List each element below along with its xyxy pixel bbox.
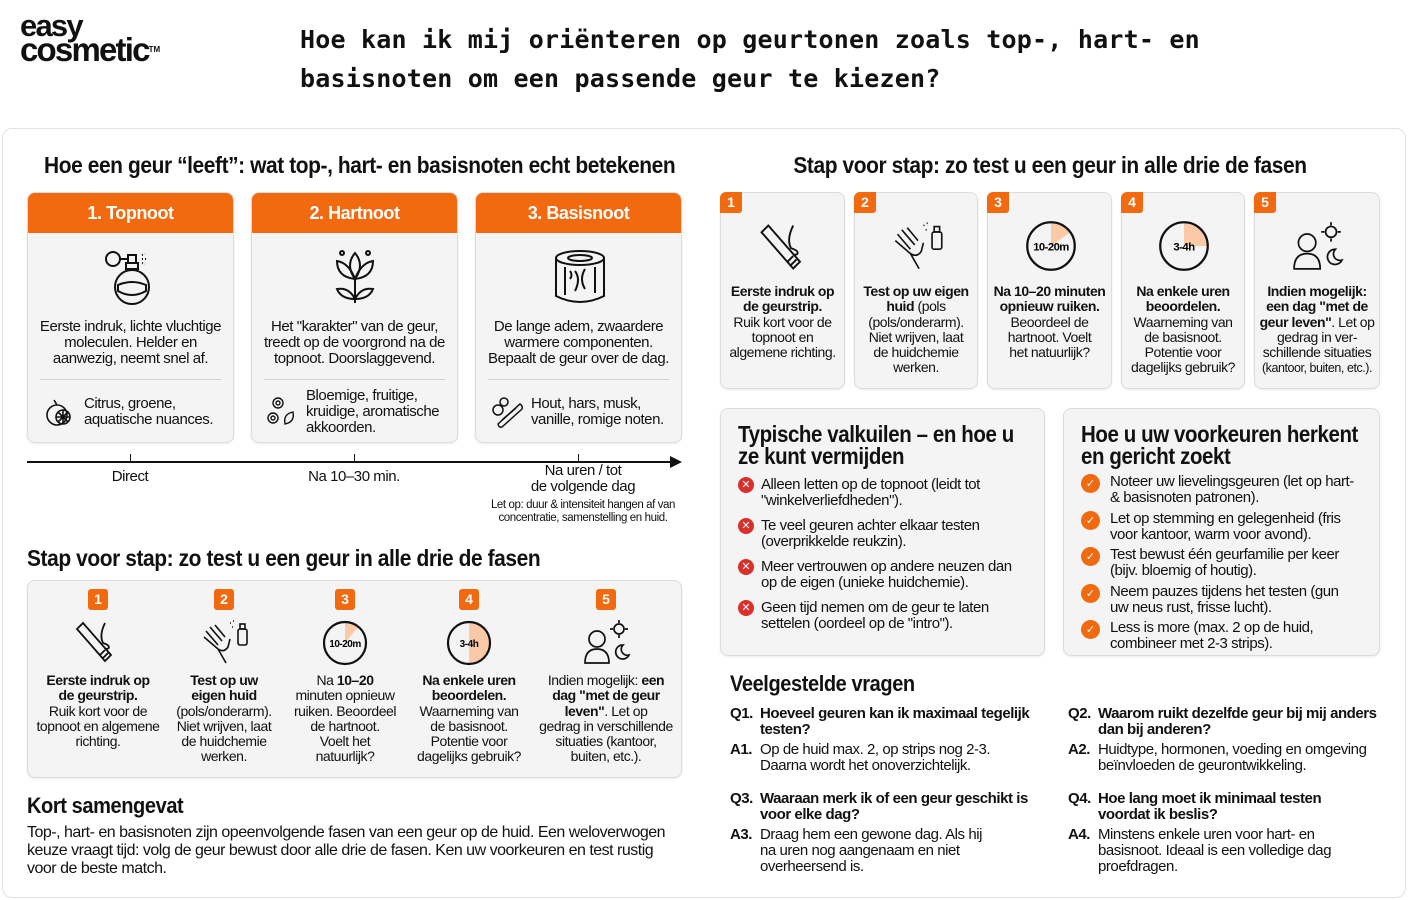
summary text: keuze vraagt tijd: volg de geur bewust door alle drie de fasen. Ken uw voorkeuren en test rustig <box>27 842 653 859</box>
heading: FAQ: Veelgestelde vragen <box>730 671 915 696</box>
step card 2: werken. <box>893 359 939 375</box>
card: topnoot: Citrus, groene, <box>84 395 176 412</box>
step 2: 2 <box>220 591 228 607</box>
step 5: dag "met de geur <box>552 687 660 703</box>
step 2 <box>176 589 272 764</box>
heading: notes: Hoe een geur “leeft”: wat top-, hart- en basisnoten echt betekenen <box>44 152 675 178</box>
step 4: 4 <box>465 591 473 607</box>
step card 3: hartnoot. Voelt <box>1008 329 1091 345</box>
step 2: Test op uw <box>190 672 258 688</box>
preferences heading: Hoe u uw voorkeuren herkent en gericht zoekt <box>1081 421 1358 469</box>
step card 2: de huidchemie <box>873 344 959 360</box>
step 4: Na enkele uren <box>422 672 516 688</box>
card: hartnoot: treedt op de voorgrond na de <box>264 334 445 351</box>
faq 4 <box>1068 790 1331 875</box>
logo: easy <box>20 8 82 43</box>
timeline label: hours: Na uren / tot <box>545 462 621 479</box>
pitfall 3: ✕ <box>741 560 751 573</box>
faq 3: na uren nog aangenaam en niet <box>760 842 960 859</box>
step 3: 3 <box>341 591 349 607</box>
pref 1 <box>1081 473 1354 506</box>
step card 1: de geurstrip. <box>743 298 822 314</box>
step card 4 <box>1121 192 1245 389</box>
step card 2: (pols/onderarm). <box>868 314 964 330</box>
faq 3: Q3. <box>730 790 753 807</box>
step card 1: 1 <box>727 194 735 210</box>
card: basisnoot: De lange adem, zwaardere <box>494 318 663 335</box>
step 2: eigen huid <box>191 687 257 703</box>
step card 5: gedrag in ver- <box>1277 329 1357 345</box>
step card 3 <box>987 192 1112 389</box>
step card 5: 5 <box>1261 194 1269 210</box>
timeline label: direct: Direct <box>112 468 148 485</box>
faq 1: Hoeveel geuren kan ik maximaal tegelijk <box>760 705 1029 722</box>
pref 3 <box>1081 546 1340 579</box>
pitfall 2: Te veel geuren achter elkaar testen (overprikkelde reukzin). <box>761 517 980 550</box>
timeline note <box>491 499 675 524</box>
card: hartnoot: Het "karakter" van de geur, <box>271 318 438 335</box>
step card 4: dagelijks gebruik? <box>1131 359 1235 375</box>
title <box>300 25 1200 93</box>
step 1: de geurstrip. <box>59 687 137 703</box>
pref 5: combineer met 2-3 strips). <box>1110 635 1273 652</box>
faq 4: basisnoot. Ideaal is een volledige dag <box>1098 842 1331 859</box>
pref 3: ✓ <box>1086 550 1095 563</box>
faq 4: Hoe lang moet ik minimaal testen <box>1098 790 1321 807</box>
step card 4: beoordelen. <box>1146 298 1220 314</box>
pref 1: ✓ <box>1086 477 1095 490</box>
step card 1 <box>720 192 845 389</box>
faq 4: Minstens enkele uren voor hart- en <box>1098 826 1314 843</box>
card: hartnoot: akkoorden. <box>306 419 376 436</box>
step card 5: geur leven". Let op <box>1260 314 1374 330</box>
faq 1: Daarna wordt het onoverzichtelijk. <box>760 757 971 774</box>
faq 3: A3. <box>730 826 752 843</box>
step 3: de hartnoot. <box>310 718 380 734</box>
faq 2: beïnvloeden de geurontwikkeling. <box>1098 757 1306 774</box>
card: basisnoot <box>475 192 682 443</box>
card: hartnoot: 2. Hartnoot <box>309 203 400 223</box>
pref 4: uw neus rust, frisse lucht). <box>1110 599 1272 616</box>
step card 3: het natuurlijk? <box>1009 344 1090 360</box>
faq 2: dan bij anderen? <box>1098 721 1211 738</box>
faq 4: A4. <box>1068 826 1090 843</box>
step 3: minuten opnieuw <box>295 687 395 703</box>
step card 3: Beoordeel de <box>1011 314 1088 330</box>
step 4: dagelijks gebruik? <box>417 748 521 764</box>
title: basisnoten om een passende geur te kiezen? <box>300 64 941 93</box>
step card 3: 10-20m <box>1033 242 1069 254</box>
timeline label: 10-30: Na 10–30 min. <box>308 468 400 485</box>
step card 2: Test op uw eigen <box>863 283 969 299</box>
icon: log <box>555 250 605 303</box>
step card 4: 3-4h <box>1173 242 1195 254</box>
faq 3: Waaraan merk ik of een geur geschikt is <box>760 790 1028 807</box>
pref 4: ✓ <box>1086 587 1095 600</box>
pref 3: Test bewust één geurfamilie per keer <box>1110 546 1339 563</box>
faq 3: overheersend is. <box>760 858 864 875</box>
pref 2: Let op stemming en gelegenheid (fris <box>1110 510 1341 527</box>
heading: steps right: Stap voor stap: zo test u een geur in alle drie de fasen <box>793 152 1307 178</box>
heading: steps left: Stap voor stap: zo test u een geur in alle drie de fasen <box>27 545 540 571</box>
faq 3: Draag hem een gewone dag. Als hij <box>760 826 982 843</box>
card: basisnoot: warmere componenten. <box>504 334 653 351</box>
logo <box>20 8 160 68</box>
heading: summary: Kort samengevat <box>27 793 183 818</box>
card: topnoot: moleculen. Helder en <box>64 334 197 351</box>
pref 1: & basisnoten patronen). <box>1110 489 1259 506</box>
pref 3: (bijv. bloemig of houtig). <box>1110 562 1256 579</box>
step 5: situaties (kantoor, <box>555 733 657 749</box>
step card 3: opnieuw ruiken. <box>1000 298 1099 314</box>
step 4: 3-4h <box>460 639 479 650</box>
step 5: buiten, etc.). <box>571 748 641 764</box>
step 3 <box>294 589 396 764</box>
step 1: Ruik kort voor de <box>49 703 147 719</box>
faq 2: A2. <box>1068 741 1090 758</box>
pitfall 1: Alleen letten op de topnoot (leidt tot "winkelverliefdheden"). <box>761 476 980 509</box>
pref 2: ✓ <box>1086 514 1095 527</box>
step card 2: huid (pols <box>886 298 946 314</box>
step card 2 <box>854 192 978 389</box>
step 2: de huidchemie <box>181 733 267 749</box>
pref 4: Neem pauzes tijdens het testen (gun <box>1110 583 1339 600</box>
step 5: 5 <box>602 591 610 607</box>
card: topnoot: aanwezig, neemt snel af. <box>53 350 208 367</box>
step card 4: Na enkele uren <box>1136 283 1230 299</box>
step card 5: (kantoor, buiten, etc.). <box>1262 361 1372 375</box>
step 5: gedrag in verschillende <box>539 718 673 734</box>
step 5: leven". Let op <box>565 703 647 719</box>
timeline <box>27 454 682 524</box>
step card 2: 2 <box>861 194 869 210</box>
icon: flowers herbs <box>267 397 294 425</box>
faq 2 <box>1068 705 1377 774</box>
step 1: richting. <box>76 733 120 749</box>
step card 1: algemene richting. <box>729 344 836 360</box>
panel: steps left <box>27 580 682 778</box>
faq 3 <box>730 790 1028 875</box>
pref 2 <box>1081 510 1341 543</box>
step card 5: schillende situaties <box>1263 344 1371 360</box>
faq 2: Waarom ruikt dezelfde geur bij mij anders <box>1098 705 1377 722</box>
step card 5: een dag "met de <box>1266 298 1368 314</box>
timeline label: hours <box>531 462 635 495</box>
card: hartnoot: kruidige, aromatische <box>306 403 439 420</box>
card: topnoot: 1. Topnoot <box>87 203 174 223</box>
icon: perfume bottle <box>105 251 150 305</box>
icon: vanilla wood <box>492 397 523 428</box>
panel: preferences <box>1063 408 1380 656</box>
pitfall 1: ✕ <box>741 478 751 491</box>
step card 1: Eerste indruk op <box>731 283 834 299</box>
step card 2: Niet wrijven, laat <box>869 329 963 345</box>
pitfall 3: Meer vertrouwen op andere neuzen dan op de eigen (unieke huidchemie). <box>761 558 1012 591</box>
card: topnoot: Eerste indruk, lichte vluchtige <box>40 318 221 335</box>
faq 2: Huidtype, hormonen, voeding en omgeving <box>1098 741 1366 758</box>
card: hartnoot: topnoot. Doorslaggevend. <box>274 350 435 367</box>
step 1: topnoot en algemene <box>36 718 160 734</box>
step card 1: topnoot en <box>752 329 813 345</box>
card: hartnoot: Bloemige, fruitige, <box>306 387 418 404</box>
title: Hoe kan ik mij oriënteren op geurtonen zoals top-, hart- en <box>300 25 1200 54</box>
card: basisnoot: Hout, hars, musk, <box>531 395 641 412</box>
pitfall 4: Geen tijd nemen om de geur te laten settelen (oordeel op de "intro"). <box>761 599 989 632</box>
step 4: beoordelen. <box>432 687 506 703</box>
step 3: Na 10–20 <box>316 672 374 688</box>
icon: citrus <box>46 400 71 426</box>
card: hartnoot <box>251 192 458 443</box>
step 4: de basisnoot. <box>430 718 508 734</box>
step 4 <box>417 589 521 764</box>
pref 2: voor kantoor, warm voor avond). <box>1110 526 1311 543</box>
faq 4: proefdragen. <box>1098 858 1178 875</box>
card: basisnoot: vanille, romige noten. <box>531 411 664 428</box>
card: topnoot <box>27 192 234 443</box>
pref 5: ✓ <box>1086 623 1095 636</box>
faq 1 <box>730 705 1030 774</box>
pref 5: Less is more (max. 2 op de huid, <box>1110 619 1313 636</box>
step 2: Niet wrijven, laat <box>177 718 271 734</box>
card: basisnoot: Bepaalt de geur over de dag. <box>488 350 669 367</box>
step card 3: 3 <box>994 194 1002 210</box>
card: topnoot: aquatische nuances. <box>84 411 213 428</box>
summary text <box>27 824 665 877</box>
step card 5 <box>1254 192 1380 389</box>
pitfalls heading: Typische valkuilen – en hoe u ze kunt vermijden <box>738 421 1014 469</box>
step card 4: Potentie voor <box>1145 344 1221 360</box>
step 4: Potentie voor <box>431 733 507 749</box>
timeline label: hours: de volgende dag <box>531 478 635 495</box>
faq 1: A1. <box>730 741 752 758</box>
timeline note: concentratie, samenstelling en huid. <box>498 512 668 524</box>
faq 2: Q2. <box>1068 705 1091 722</box>
step 1: Eerste indruk op <box>46 672 150 688</box>
step 1: 1 <box>94 591 102 607</box>
faq 1: Op de huid max. 2, op strips nog 2-3. <box>760 741 990 758</box>
faq 3: voor elke dag? <box>760 806 860 823</box>
icon: flower <box>336 250 374 303</box>
timeline note: Let op: duur & intensiteit hangen af van <box>491 499 675 511</box>
step 5 <box>539 589 673 764</box>
logo: cosmeticTM <box>20 31 160 68</box>
step 1 <box>36 589 160 749</box>
step card 4: Waarneming van <box>1133 314 1232 330</box>
faq 4: voordat ik beslis? <box>1098 806 1217 823</box>
step card 3: Na 10–20 minuten <box>994 283 1105 299</box>
step card 4: de basisnoot. <box>1144 329 1222 345</box>
pitfall 4: ✕ <box>741 601 751 614</box>
step card 1: Ruik kort voor de <box>733 314 832 330</box>
panel: pitfalls <box>720 408 1045 656</box>
step card 5: Indien mogelijk: <box>1267 283 1367 299</box>
card: basisnoot: 3. Basisnoot <box>528 203 629 223</box>
pref 4 <box>1081 583 1339 616</box>
faq 1: testen? <box>760 721 810 738</box>
step 4: Waarneming van <box>419 703 518 719</box>
summary text: voor de beste match. <box>27 860 166 877</box>
step 2: werken. <box>201 748 247 764</box>
faq 1: Q1. <box>730 705 753 722</box>
step 3: natuurlijk? <box>316 748 374 764</box>
step 2: (pols/onderarm). <box>176 703 272 719</box>
step 3: ruiken. Beoordeel <box>294 703 396 719</box>
step card 4: 4 <box>1128 194 1136 210</box>
summary text: Top-, hart- en basisnoten zijn opeenvolgende fasen van een geur op de huid. Een weloverwogen <box>27 824 665 841</box>
step 5: Indien mogelijk: een <box>548 672 664 688</box>
pref 5 <box>1081 619 1313 652</box>
step 3: 10-20m <box>329 639 361 650</box>
pref 1: Noteer uw lievelingsgeuren (let op hart- <box>1110 473 1354 490</box>
faq 4: Q4. <box>1068 790 1091 807</box>
step 3: Voelt het <box>320 733 370 749</box>
pitfall 2: ✕ <box>741 519 751 532</box>
